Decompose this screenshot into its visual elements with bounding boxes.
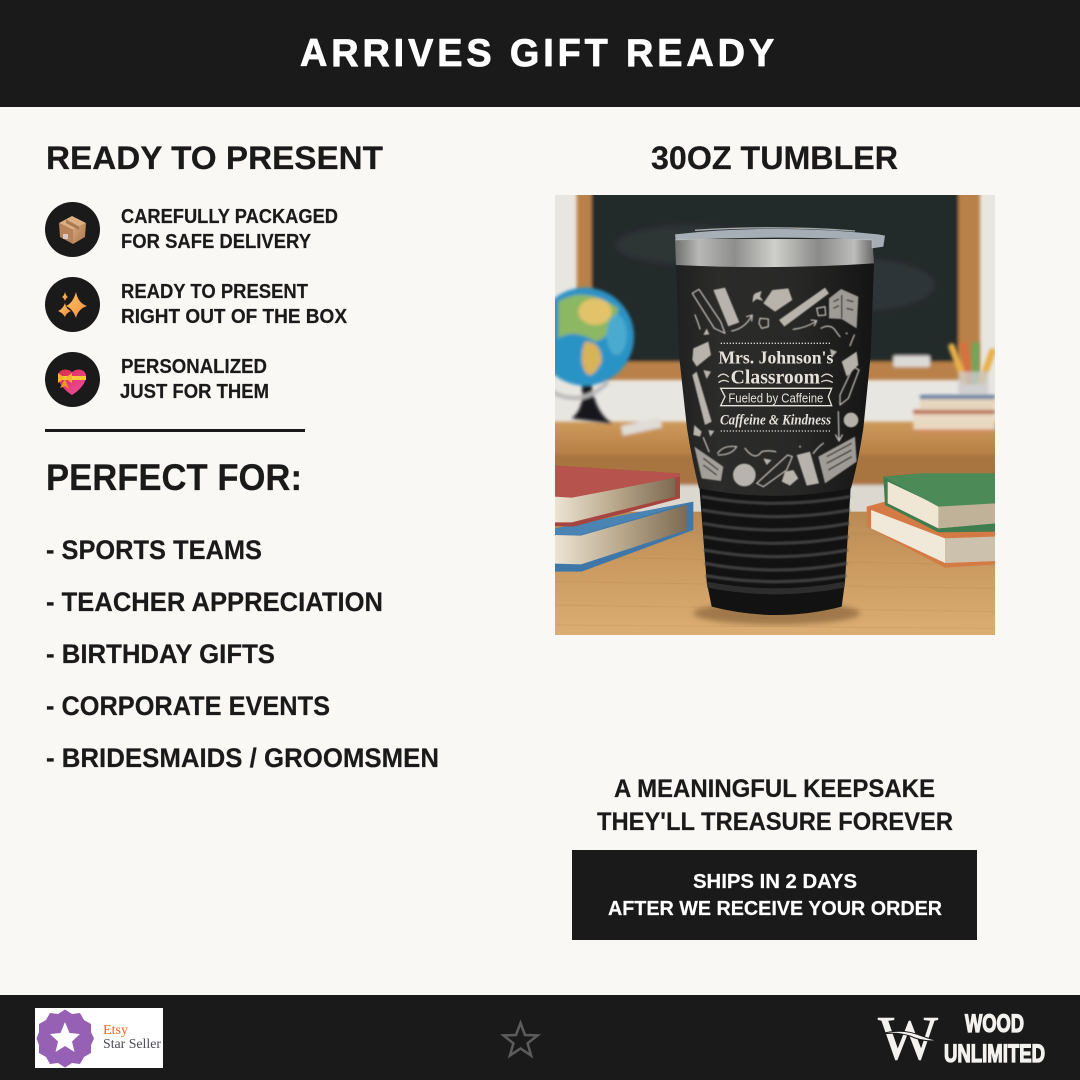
heading: ready to present: READY TO PRESENT [46, 140, 383, 176]
badge: etsy star seller [35, 1008, 163, 1068]
label: ready to present: RIGHT OUT OF THE BOX [121, 306, 348, 328]
pencil cup and back books [913, 345, 995, 433]
list: occasions: - BRIDESMAIDS / GROOMSMEN [46, 743, 439, 773]
engraved text: Mrs. Johnson's [718, 347, 833, 367]
callout: shipping: SHIPS IN 2 DAYS [693, 871, 857, 893]
logo wordmark: UNLIMITED [944, 1040, 1045, 1068]
panel: perfect for [46, 457, 439, 773]
title: ARRIVES GIFT READY [300, 32, 778, 75]
engraved text: Fueled by Caffeine [728, 390, 823, 405]
label: carefully packaged: FOR SAFE DELIVERY [121, 231, 312, 253]
table top [555, 512, 995, 635]
stacked books left [555, 466, 693, 572]
steel band [675, 239, 874, 267]
stacked books right [867, 473, 995, 568]
logo mark: W: W [878, 1005, 938, 1073]
feature row: carefully packaged [45, 202, 338, 257]
feature row: ready to present [45, 277, 348, 332]
list: occasions: - BIRTHDAY GIFTS [46, 639, 275, 669]
caption: keepsake: THEY'LL TREASURE FOREVER [597, 808, 953, 836]
header bar [0, 0, 1080, 107]
list: occasions: - TEACHER APPRECIATION [46, 587, 383, 617]
icon: gift heart [58, 369, 86, 395]
tumbler shadow [693, 602, 860, 625]
tumbler [675, 228, 885, 615]
engraved text: Classroom [731, 367, 820, 389]
callout: shipping [572, 850, 977, 940]
back desk [548, 418, 1002, 515]
badge text: Star Seller [103, 1036, 162, 1051]
footer bar [0, 995, 1080, 1080]
heading: 30oz tumbler: 30OZ TUMBLER [651, 140, 898, 176]
globe [536, 288, 634, 423]
engraved text: Caffeine & Kindness [720, 412, 831, 428]
list: occasions: - SPORTS TEAMS [46, 535, 262, 565]
label: carefully packaged: CAREFULLY PACKAGED [121, 206, 338, 228]
caption: keepsake: A MEANINGFUL KEEPSAKE [614, 775, 935, 803]
icon: outline star [503, 1023, 538, 1056]
icon: purple rosette [36, 1010, 94, 1068]
label: personalized: PERSONALIZED [121, 356, 267, 378]
product photo: engraved tumbler on classroom desk [555, 195, 995, 635]
logo wordmark: WOOD [965, 1010, 1024, 1038]
callout: shipping: AFTER WE RECEIVE YOUR ORDER [608, 898, 943, 920]
lid [675, 229, 885, 248]
logo: wood unlimited [878, 1005, 1045, 1073]
ridged base [699, 482, 851, 615]
label: personalized: JUST FOR THEM [120, 381, 269, 403]
list: occasions: - CORPORATE EVENTS [46, 691, 330, 721]
blackboard [577, 188, 980, 380]
panel: ready to present [45, 140, 383, 407]
engraved text [718, 343, 833, 431]
heading: perfect for: PERFECT FOR: [46, 457, 302, 498]
engraved doodles [692, 288, 859, 487]
label: ready to present: READY TO PRESENT [121, 281, 308, 303]
icon: package [59, 216, 86, 244]
icon: sparkles [58, 292, 87, 318]
body [676, 263, 874, 496]
feature row: personalized [45, 352, 269, 407]
badge text: Etsy [103, 1022, 128, 1037]
